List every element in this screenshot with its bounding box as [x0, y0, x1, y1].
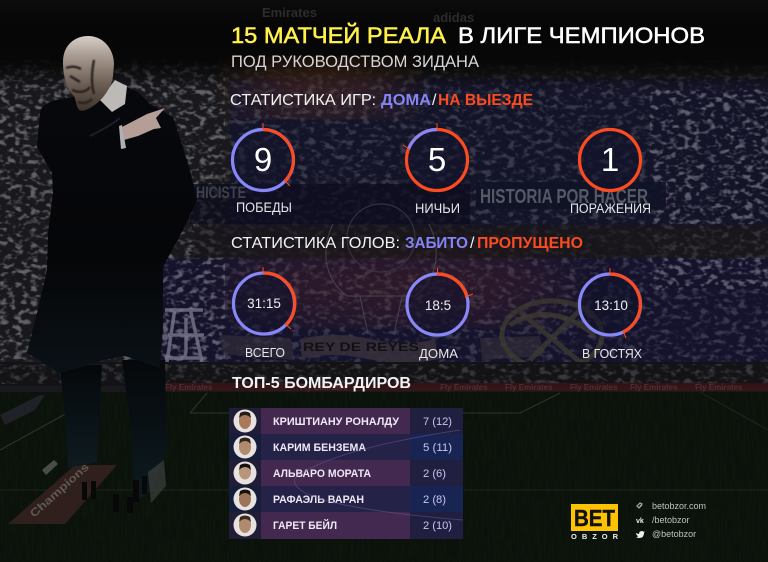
- heading: goal stats: ЗАБИТО: [405, 235, 468, 252]
- figure: Zidane: [27, 36, 197, 513]
- label: draws: НИЧЬИ: [415, 201, 460, 216]
- icon: vk: vk: [636, 518, 644, 525]
- ring: away goals: 13:10: [594, 298, 628, 313]
- row: Morata: АЛЬВАРО МОРАТА: [273, 468, 371, 480]
- subtitle: ПОД РУКОВОДСТВОМ ЗИДАНА: [231, 52, 480, 71]
- figure: coat: [27, 82, 197, 373]
- background: banner HICISTE: HICISTE: [196, 183, 246, 202]
- row: Varane: 2 (8): [423, 494, 446, 506]
- row: Benzema: [229, 434, 463, 460]
- row: Benzema: 5 (11): [423, 442, 452, 454]
- table: top scorers: [229, 408, 463, 539]
- background: top stadium signs: [262, 5, 474, 25]
- heading: game stats: НА ВЫЕЗДЕ: [438, 92, 533, 109]
- logo: BET OBZOR: BET: [574, 505, 615, 531]
- ring: home goals: [407, 268, 473, 335]
- social links: [636, 501, 706, 539]
- ring: losses: 1: [601, 141, 619, 178]
- social links: /betobzor: [652, 515, 690, 525]
- heading: game stats: СТАТИСТИКА ИГР:: [230, 92, 376, 109]
- background: pitch: Champions: [28, 461, 92, 520]
- background: rey de reyes banner: [220, 335, 544, 363]
- row: Ronaldo: 7 (12): [423, 416, 452, 428]
- background: lower stands: [0, 362, 768, 386]
- ring: home goals: 18:5: [425, 298, 451, 313]
- row: Bale: [229, 512, 463, 539]
- background: top stadium signs: adidas: [433, 10, 474, 25]
- row: Varane: РАФАЭЛЬ ВАРАН: [273, 494, 364, 506]
- heading: goal stats: ПРОПУЩЕНО: [477, 235, 583, 252]
- row: Bale: ГАРЕТ БЕЙЛ: [273, 519, 337, 532]
- background: advertising boards: [160, 383, 768, 392]
- background: left crest: [165, 308, 204, 362]
- background: rey de reyes banner: REY DE REYES: [303, 340, 419, 354]
- label: losses: ПОРАЖЕНИЯ: [570, 201, 651, 216]
- heading: game stats: [230, 92, 533, 109]
- background: advertising boards: Fly Emirates: [440, 383, 488, 392]
- row: Ronaldo: [229, 408, 463, 434]
- background: tifo banner band: [160, 258, 768, 366]
- figure: legs: [60, 360, 167, 513]
- row: Ronaldo: КРИШТИАНУ РОНАЛДУ: [273, 416, 399, 428]
- background: advertising boards: Fly Emirates: [165, 383, 213, 392]
- ring: draws: 5: [428, 141, 446, 178]
- social links: betobzor.com: [652, 501, 706, 511]
- ring: wins: [232, 123, 294, 190]
- icon: link: [637, 503, 642, 508]
- background: trophy: [326, 204, 436, 334]
- logo: BET OBZOR: [571, 504, 619, 541]
- ring: total goals: 31:15: [247, 296, 281, 311]
- row: Bale: 2 (10): [423, 520, 452, 532]
- title: В ЛИГЕ ЧЕМПИОНОВ: [458, 23, 705, 48]
- background: advertising boards: Fly Emirates: [630, 383, 678, 392]
- background: top stadium signs: Emirates: [262, 5, 317, 20]
- figure: head: [63, 36, 114, 111]
- ring: draws: [403, 123, 468, 190]
- heading: game stats: ДОМА: [381, 92, 431, 109]
- heading: top scorers: ТОП-5 БОМБАРДИРОВ: [232, 375, 411, 392]
- ring: losses: [580, 130, 640, 190]
- background: banner HISTORIA POR HACER: HISTORIA POR HACER: [480, 186, 648, 208]
- figure: sleeve cuff: [119, 125, 126, 149]
- figure: face shadows: [66, 60, 94, 103]
- figure: arm fold highlight: [90, 118, 120, 136]
- heading: game stats: /: [432, 92, 437, 109]
- row: Benzema: КАРИМ БЕНЗЕМА: [273, 442, 366, 454]
- background: advertising boards: Fly Emirates: [570, 383, 618, 392]
- background: advertising boards: Fly Emirates: [695, 383, 743, 392]
- heading: goal stats: [231, 235, 583, 252]
- logo: BET OBZOR: OBZOR: [571, 532, 619, 541]
- label: total: ВСЕГО: [245, 345, 285, 360]
- title: [231, 23, 705, 48]
- ring: total goals: [234, 267, 295, 334]
- background: pitch: [0, 392, 768, 562]
- label: wins: ПОБЕДЫ: [236, 200, 292, 215]
- title: 15 МАТЧЕЙ РЕАЛА: [231, 23, 446, 48]
- label: away: В ГОСТЯХ: [582, 346, 642, 361]
- social links: @betobzor: [652, 529, 696, 539]
- background: banner HISTORIA POR HACER: [476, 182, 666, 209]
- row: Morata: 2 (6): [423, 468, 446, 480]
- icon: twitter: [636, 531, 645, 538]
- background: real madrid crest: [502, 301, 602, 369]
- background: advertising boards: Fly Emirates: [505, 383, 553, 392]
- row: Morata: [229, 460, 463, 486]
- background: blue home stand tint: [230, 78, 768, 228]
- heading: goal stats: СТАТИСТИКА ГОЛОВ:: [231, 235, 400, 252]
- background: advertising boards: Fly Emirates: [300, 383, 348, 392]
- ring: away goals: [580, 268, 640, 338]
- figure: shirt collar: [100, 80, 127, 112]
- row: Varane: [229, 486, 463, 512]
- ring: wins: 9: [254, 141, 272, 178]
- label: home: ДОМА: [419, 346, 458, 361]
- figure: pointing hand: [122, 108, 165, 140]
- heading: goal stats: /: [470, 235, 475, 252]
